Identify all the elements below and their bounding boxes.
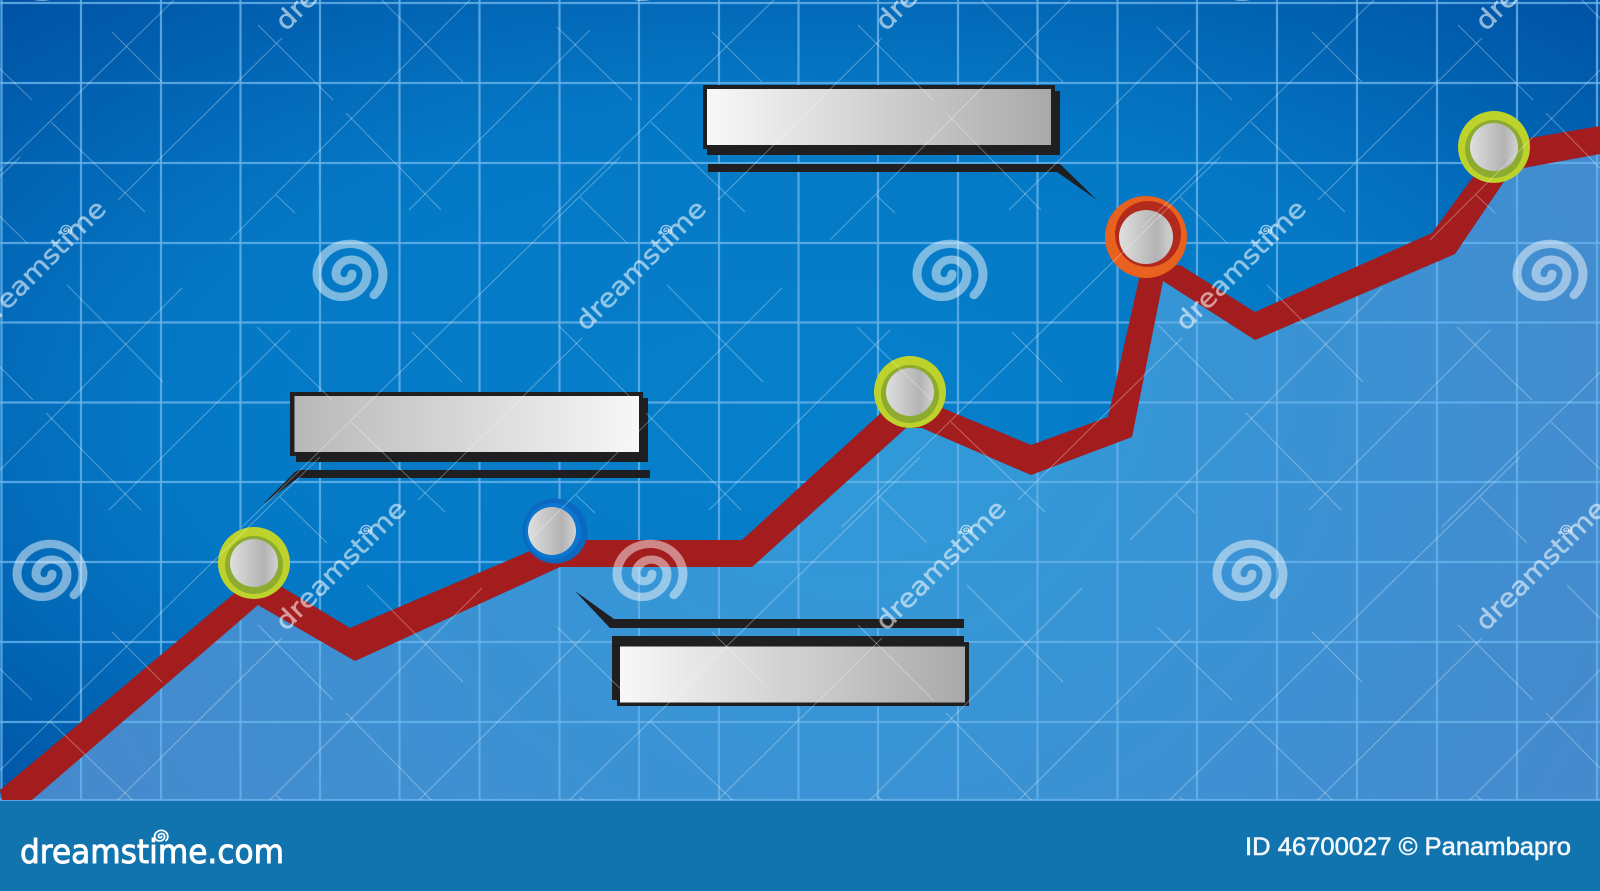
watermark: dreamstime text: dreamstime bbox=[1470, 494, 1600, 637]
marker: lime point 1 bbox=[218, 527, 290, 599]
watermark: dreamstime text: dreamstime bbox=[270, 494, 413, 637]
marker: lime point 5 bbox=[1458, 111, 1530, 183]
watermark: dreamstime text: dreamstime bbox=[1170, 194, 1313, 337]
area under the line bbox=[30, 154, 1600, 800]
marker: lime point 3 bbox=[874, 356, 946, 428]
callout: lower label box bbox=[575, 591, 969, 706]
footer credit: ID 46700027 © Panambapro bbox=[1245, 833, 1571, 861]
watermark: small spiral marks bbox=[61, 225, 1571, 534]
marker: blue point 2 bbox=[522, 498, 588, 564]
callout: left label box bbox=[262, 392, 650, 505]
footer band bbox=[0, 801, 1600, 891]
watermark: dreamstime text: dreamstime bbox=[870, 494, 1013, 637]
watermark: spirals bbox=[17, 0, 1583, 597]
watermark: dreamstime text: dreamstime bbox=[570, 194, 713, 337]
footer logo: dreamstime.com bbox=[20, 832, 284, 871]
red trend line bbox=[0, 126, 1600, 800]
callout: top label box bbox=[703, 85, 1097, 200]
watermark: dreamstime text bbox=[0, 0, 1600, 637]
marker: orange point 4 bbox=[1105, 196, 1187, 278]
